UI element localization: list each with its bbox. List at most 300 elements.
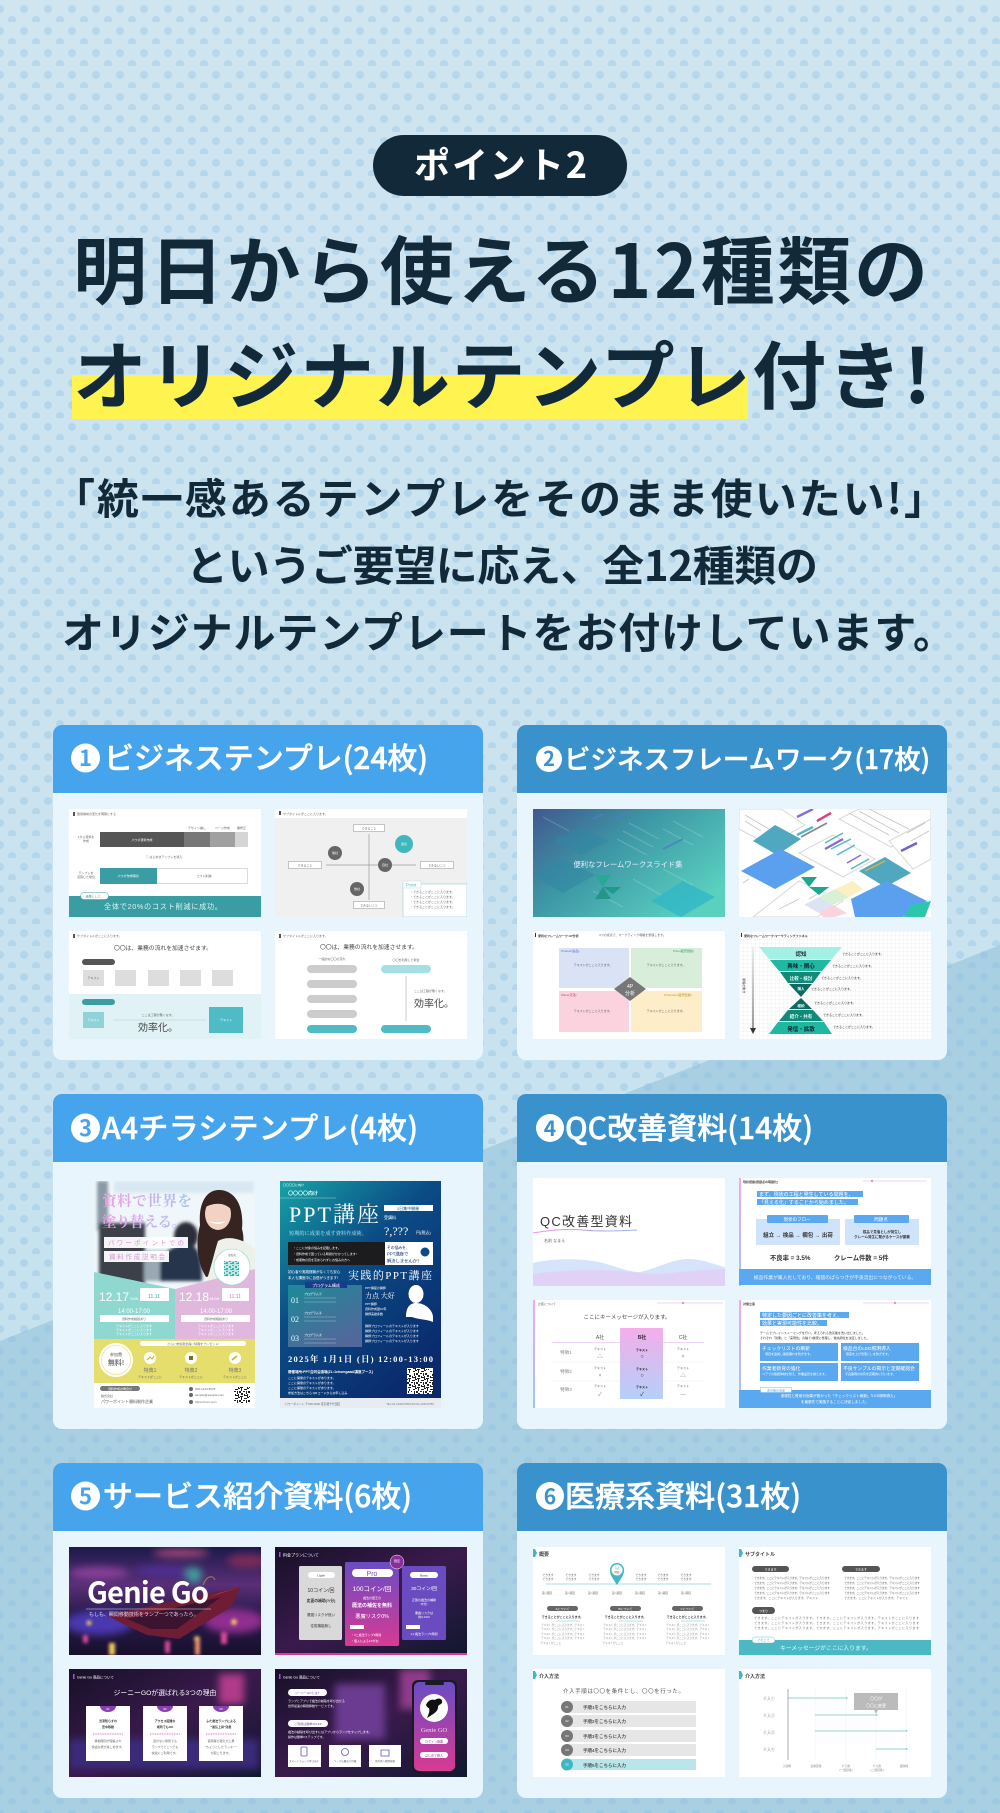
thumbnail: cost bars: [69, 809, 261, 917]
thumbnail: flyer 1: 14:00-17:00: [200, 1309, 233, 1315]
thumbnail: flyer 1: 資料作成相談あり: [122, 1316, 146, 1321]
thumbnail: three reasons: "ちょっとしたラッキー": [205, 1744, 237, 1749]
thumbnail: marketing funnel: 興味・関心: [787, 962, 815, 970]
thumbnail: cost bars: 作成: [83, 838, 89, 843]
thumbnail: marketing funnel: 認知: [795, 950, 807, 958]
thumbnail: price plans: 悪魔リスクが低い: [307, 1612, 335, 1617]
thumbnail: flyer 1: テキストがここに入ります: [198, 1323, 234, 1328]
thumbnail: price plans: 悪魔リスクは: [415, 1610, 433, 1615]
thumbnail: subtitle text: キーメッセージがここに入ります。: [780, 1644, 872, 1652]
thumbnail: cost bars: パワポ作成時間: [117, 873, 139, 878]
thumbnail: flyer 2: ここに開催のテキストがあります。: [288, 1380, 336, 1385]
thumbnail: 4P quadrant: テキストがここに入ります。: [647, 1008, 685, 1013]
panel: 医療系資料: [517, 1463, 947, 1798]
thumbnail: three reasons: 02: [163, 1707, 167, 1711]
thumbnail: price plans: 正確の魔法の補助: [412, 1597, 436, 1602]
thumbnail: QC flow: 不良率 = 3.5%: [770, 1253, 811, 1262]
icon: number 3: [71, 1111, 100, 1143]
thumbnail: overview timeline: [533, 1547, 725, 1655]
thumbnail: flyer 2: 円(税込): [416, 1229, 431, 1235]
thumbnail: improvement measures: を最優先で実施することに決定しました。: [801, 1399, 869, 1404]
thumbnail: marketing funnel: 購入: [798, 986, 805, 991]
thumbnail: flyer 2: 解決しませんか?: [387, 1258, 420, 1264]
thumbnail: flyer 2: PPT講師: [365, 1301, 377, 1306]
thumbnail: improvement measures: ペアでの確認体制を整え、作業品質を揃えます。: [762, 1371, 828, 1376]
thumbnail: 4P quadrant: 分析: [625, 990, 635, 997]
thumbnail: improvement measures: 効果と実現可能性を比較。: [762, 1320, 822, 1327]
thumbnail: overview timeline: テキストがここに入ります。テキスト: [541, 1636, 585, 1640]
thumbnail: intervention chart: 介入④: [763, 1747, 775, 1752]
thumbnail: positioning map: できること: [298, 862, 312, 868]
thumbnail: subtitle text: つまり: [759, 1608, 768, 1613]
thumbnail: flyer 1: 資料作成相談あり: [204, 1316, 228, 1321]
thumbnail: flow efficiency: 効率化。: [138, 1022, 178, 1034]
thumbnail: positioning map: できること: [362, 826, 376, 830]
intro text: オリジナルテンプレートをお付けしています。: [62, 600, 955, 661]
thumbnail: flyer 2: 2025年 1月1日 (日) 12:00-13:00: [288, 1354, 433, 1364]
thumbnail: comparison table: ✓: [598, 1391, 602, 1398]
intro text: 「統一感あるテンプレをそのまま使いたい!」: [53, 466, 946, 527]
thumbnail: intervention chart: 治療直後: [810, 1764, 822, 1768]
thumbnail: overview timeline: できます: [588, 1577, 600, 1581]
thumbnail: QC cover: QC改善型資料: [540, 1214, 632, 1229]
thumbnail: marketing funnel: 比較・検討: [790, 975, 813, 982]
thumbnail: flyer 2: ここに開催のテキストがあります。: [288, 1385, 336, 1390]
thumbnail: app introduction: ランプとアプリで魔法の絨毯を呼び出せる: [288, 1698, 345, 1703]
thumbnail: flow efficiency: サブタイトルがここに入ります。: [77, 933, 122, 938]
thumbnail: flyer 1: 資料作成お問合せ: [108, 1386, 132, 1391]
icon: number 2: [536, 743, 562, 772]
thumbnail: price plans: (5分): [421, 1601, 427, 1606]
thumbnail: flyer 1: テキストがここに入ります: [198, 1327, 234, 1332]
icon: number 6: [536, 1481, 564, 1511]
thumbnail: 4P quadrant: Product(製品): [561, 948, 579, 953]
thumbnail: price plans: 1ヶ魔法ランプ1時間: [410, 1631, 438, 1636]
thumbnail: vertical flow: ここは工程が無くなす。: [414, 988, 447, 993]
thumbnail: overview timeline: できます: [657, 1573, 669, 1577]
thumbnail: flyer 1: MON: [210, 1296, 219, 1301]
silhouette: [406, 1285, 433, 1322]
thumbnail: overview timeline: 介入: [614, 1566, 620, 1570]
thumbnail: comparison table: A社: [596, 1334, 604, 1341]
thumbnail: cost bars: 結果として、: [86, 894, 103, 898]
thumbnail: overview timeline: Aについて: [556, 1607, 569, 1611]
thumbnail: marketing funnel: できることがここに入ります。: [833, 1024, 875, 1029]
panel: A4チラシテンプレ: [53, 1094, 483, 1429]
thumbnail: subtitle text: できます。ここにテキストが入ります。テキストがここに入ります: [754, 1575, 830, 1580]
thumbnail: positioning map: できないこと: [360, 902, 378, 908]
thumbnail: subtitle text: できます。ここにテキストが入ります。テキストがここに入ります: [844, 1575, 920, 1580]
thumbnail: comparison table: △: [597, 1352, 603, 1360]
thumbnail: flyer 2: 01: [291, 1296, 299, 1305]
thumbnail: flyer 1: 参加費: [110, 1351, 122, 1357]
thumbnail: overview timeline: 第○期目: [588, 1591, 598, 1595]
icon: number 4: 4: [544, 1113, 556, 1143]
thumbnail: marketing funnel: 発信・拡散: [787, 1025, 815, 1033]
thumbnail: comparison table: —: [680, 1392, 686, 1398]
thumbnail: price plans: 料金プランについて: [283, 1552, 319, 1558]
heading: サービス紹介資料(6枚): [103, 1472, 412, 1516]
thumbnail: overview timeline: テキストがここに入ります。テキスト: [603, 1623, 647, 1627]
thumbnail: overview timeline: できます: [565, 1577, 577, 1581]
thumbnail: vertical flow: 効率化。: [414, 998, 454, 1010]
thumbnail: overview timeline: テキストがここに入ります。テキスト: [666, 1636, 710, 1640]
thumbnail: subtitle text: できます。ここにテキストが入ります。テキストがここに入ります: [844, 1585, 920, 1590]
thumbnail: comparison table: ×: [681, 1354, 685, 1360]
thumbnail: overview timeline: テキストがここに入ります。テキスト: [541, 1623, 585, 1627]
thumbnail: overview timeline: テキストがここに: [603, 1641, 624, 1645]
thumbnail: subtitle text: できます。ここにテキストが入ります。テキストがここに入ります: [754, 1580, 830, 1585]
thumbnail: intervention chart: 入院時: [783, 1764, 791, 1768]
thumbnail: improvement measures: 改善策の決定: [767, 1388, 785, 1392]
thumbnail: overview timeline: テキストがここに入ります。テキスト: [666, 1627, 710, 1631]
thumbnail: 4P quadrant: Promotion(販売促進): [664, 992, 692, 997]
thumbnail: app introduction: ジーニーGOとは?: [295, 1690, 319, 1695]
thumbnail: marketing funnel: できることがここに入ります。: [821, 975, 863, 980]
thumbnail: overview timeline: Bについて: [619, 1607, 632, 1611]
thumbnail: marketing funnel: 継続: [798, 1003, 805, 1008]
thumbnail: flyer 2: プログラム構成: [312, 1282, 340, 1288]
thumbnail: marketing funnel: できることがここに入ります。: [832, 963, 874, 968]
thumbnail: intervention chart: 介入後: [873, 1764, 881, 1768]
thumbnail: comparison table: ○: [640, 1373, 644, 1379]
thumbnail: comparison table: テキスト: [636, 1384, 648, 1389]
thumbnail: overview timeline: テキストがここに: [541, 1641, 562, 1645]
thumbnail: overview timeline: テキストがここに入ります。テキスト: [603, 1627, 647, 1631]
thumbnail: subtitle text: できます。ここにテキストが入ります。できます。ここにテキストが入ります。テキストがここに入ります: [754, 1625, 919, 1630]
thumbnail: intervention steps: [533, 1669, 725, 1777]
thumbnail: intervention steps: 介入手順は〇〇を条件とし、〇〇を行った。: [563, 1687, 684, 1695]
thumbnail: 4P quadrant: テキストがここに入ります。: [574, 1008, 612, 1013]
thumbnail: comparison table: 特徴3: [560, 1386, 572, 1393]
thumbnail: price plans: 100コイン/回: [353, 1585, 391, 1593]
thumbnail: 4P quadrant: 4P: [627, 984, 634, 990]
heading: ビジネスフレームワーク(17枚): [564, 738, 930, 777]
panel: ビジネステンプレ: [53, 725, 483, 1060]
thumbnail: flyer 1: テキストがここに入ります: [116, 1331, 152, 1336]
thumbnail: flyer 2: パワーポイント:〒000-0000 東京都千代田区: [285, 1402, 341, 1406]
thumbnail: flyer 1: 11.11: [148, 1294, 160, 1300]
thumbnail: flyer 2: [280, 1181, 441, 1408]
intro text: というご要望に応え、全12種類の: [186, 533, 818, 594]
thumbnail: intervention steps: 手順4をこちらに入力: [583, 1747, 627, 1754]
thumbnail: flyer 1: 特典1: [144, 1367, 157, 1374]
thumbnail: QC cover: [533, 1178, 725, 1286]
thumbnail: cost bars: デザイン崩し: [188, 825, 206, 830]
thumbnail: overview timeline: できます: [680, 1573, 692, 1577]
badge: ポイント2: ポイント2: [414, 137, 587, 189]
thumbnail: three reasons: アクセス困難な: [155, 1718, 175, 1723]
thumbnail: three reasons: 空中移動: [102, 1724, 114, 1729]
thumbnail: three reasons: ランプでどこへでも: [152, 1744, 178, 1749]
thumbnail: flyer 2: 短期的に成果を成す資料作成術。: [289, 1229, 367, 1237]
thumbnail: flyer 2: 力点 大好: [365, 1291, 395, 1300]
intro text: [53, 466, 955, 661]
thumbnail: intervention chart: 〇〇に変更: [866, 1702, 886, 1708]
thumbnail: flyer 2: ?,???: [384, 1224, 408, 1238]
thumbnail: comparison table: ここにキーメッセージが入ります。: [583, 1313, 671, 1321]
thumbnail: app introduction: 目的地へ瞬間移動: [375, 1759, 395, 1763]
thumbnail: intervention chart: [739, 1669, 931, 1777]
phone: ログイン画面: [425, 1738, 443, 1744]
thumbnail: flyer 1: テキストがここに: [223, 1374, 247, 1379]
thumbnail: positioning map: ・できることがここに入ります。: [410, 899, 455, 904]
thumbnail: flyer 1: 参加者: [228, 1253, 236, 1257]
thumbnail: flyer 1: sample@sample.com: [195, 1393, 224, 1397]
thumbnail: flow efficiency: テキスト: [88, 1017, 99, 1022]
thumbnail: improvement measures: 実現性と費用対効果が高かった「チェックリスト刷新」「LED照明導入」: [781, 1393, 897, 1398]
thumbnail: flyer 1: 12.18: [179, 1290, 209, 1304]
thumbnail: flyer 2: ・資料作成で困っている時間がかかってします!: [293, 1251, 357, 1256]
thumbnail: overview timeline: できます: [635, 1577, 647, 1581]
thumbnail: cost bars: 微修正: [237, 825, 246, 830]
thumbnail: QC flow: 現状把握(問題点の明確化): [743, 1179, 778, 1184]
thumbnail: price plans: 魔法の補佐を無料: [352, 1602, 392, 1609]
thumbnail: subtitle text: できます。ここにテキストが入ります。テキストがここに入ります: [844, 1590, 920, 1595]
thumbnail: comparison table: 特徴1: [560, 1349, 572, 1356]
thumbnail: flyer 1: テキストがここに入ります: [198, 1331, 234, 1336]
thumbnail: comparison table: ✓: [640, 1391, 644, 1398]
thumbnail: intervention chart: 介入方法: [745, 1673, 765, 1680]
thumbnail: price plans: 30コイン/回: [411, 1586, 437, 1592]
thumbnail: price plans: ・個人による1Pがお: [351, 1638, 379, 1643]
thumbnail: Genie Go cover: もしも、瞬間移動技術をランプ一つであったら。: [89, 1611, 199, 1618]
thumbnail: vertical flow: 〇〇を利用した場合: [392, 957, 420, 962]
thumbnail: positioning map: サブタイトルがここに入ります。: [283, 811, 328, 816]
thumbnail: improvement measures: 検品台のLED照明導入: [843, 1345, 891, 1352]
thumbnail: subtitle text: できます。ここにテキストが入ります。テキストがここに入ります: [754, 1585, 830, 1590]
thumbnail: comparison table: 特徴2: [560, 1368, 572, 1375]
thumbnail: flyer 2: 初心者や実践経験がなくても安心: [288, 1269, 341, 1274]
heading: A4チラシテンプレ(4枚): [102, 1104, 418, 1148]
thumbnail: QC flow: クレーム件数 = 5件: [834, 1253, 889, 1262]
thumbnail: app introduction: [275, 1669, 467, 1777]
icon: number 1: 1: [79, 741, 92, 773]
thumbnail: flyer 2: 講師プロフィールのテキストが入ります: [365, 1338, 419, 1343]
thumbnail: comparison table: テキスト: [594, 1346, 606, 1351]
thumbnail: intervention chart: 介入②: [763, 1713, 775, 1718]
icon: number 2: 2: [543, 743, 555, 772]
thumbnail: comparison table: テキスト: [677, 1383, 689, 1388]
thumbnail: vertical flow: [275, 931, 467, 1039]
thumbnail: subtitle text: [739, 1547, 931, 1655]
thumbnail: three reasons: が起こります。: [211, 1750, 231, 1755]
thumbnail: subtitle text: サブタイトル: [745, 1551, 775, 1558]
thumbnail: three reasons: 移動時間が短縮され: [94, 1738, 122, 1743]
thumbnail: improvement measures: 項目を追加し確認漏れを防ぎます。: [765, 1351, 813, 1356]
icon: number 3: 3: [79, 1111, 92, 1143]
icon: number 1: [71, 741, 100, 773]
thumbnail: flyer 2: PPT講座で: [387, 1250, 408, 1258]
thumbnail: flyer 1: さらに参加者全員に特典をプレゼント!: [167, 1341, 219, 1346]
thumbnail: overview timeline: テキストがここに入ります。テキスト: [541, 1627, 585, 1631]
thumbnail: flyer 1: 11.11: [229, 1294, 241, 1300]
thumbnail: positioning map: 他社: [354, 886, 360, 891]
thumbnail: intervention chart: 〇〇が: [870, 1695, 882, 1701]
thumbnail: flow efficiency: ここは工程が無くなす。: [142, 1012, 174, 1017]
thumbnail: vertical flow: サブタイトルがここに入ります。: [283, 933, 328, 938]
thumbnail: comparison table: ×: [598, 1373, 602, 1379]
thumbnail: intervention chart: 介入後: [842, 1764, 850, 1768]
thumbnail: improvement measures: 不良事例の共有を定期的に行います。: [845, 1371, 896, 1376]
thumbnail: intervention chart: 退院時: [900, 1764, 908, 1768]
thumbnail: app introduction: スマートフォンで呼び出す: [289, 1759, 319, 1763]
thumbnail: improvement measures: 対策立案: [743, 1301, 755, 1306]
thumbnail: intervention steps: 手順2をこちらに入力: [583, 1718, 627, 1725]
thumbnail: flyer 2: 実践的PPT講座: [348, 1268, 432, 1282]
thumbnail: app introduction: 魔法の絨毯を呼び出すにはアプリからランプをタップします。: [288, 1729, 372, 1734]
thumbnail: overview timeline: 第○期目: [612, 1591, 622, 1595]
phone: Genie GO: [421, 1727, 448, 1734]
thumbnail: 4P quadrant: Price(販売価格): [673, 948, 694, 953]
thumbnail: intervention steps: 05: [565, 1762, 569, 1766]
thumbnail: overview timeline: できることがここに入ります。: [667, 1614, 708, 1619]
thumbnail: price plans: Light: [317, 1574, 325, 1578]
thumbnail: flyer 2: プログラム②: [304, 1310, 322, 1315]
thumbnail: flyer 1: 株式会社: [101, 1393, 113, 1398]
thumbnail: cost bars: 費用構成の変化を明確にする: [77, 811, 116, 816]
thumbnail: marketing funnel: できることがここに入ります。: [823, 1012, 865, 1017]
thumbnail: subtitle text: できます。ここにテキストが入ります。テキストがここに入ります: [844, 1580, 920, 1585]
panel: サービス紹介資料: [53, 1463, 483, 1798]
thumbnail: subtitle text: できます。ここにテキストが入ります。できます。ここにテキストが入ります。テキストがここに入ります: [754, 1620, 919, 1625]
thumbnail: improvement measures: 特定した要因ごとに改善策を考え、: [762, 1312, 842, 1319]
thumbnail: comparison table: テキスト: [594, 1365, 606, 1370]
thumbnail: positioning map: できないこと: [428, 862, 446, 868]
thumbnail: flyer 1: 塗り替える。: [102, 1213, 186, 1231]
thumbnail: cost bars: ▽ はじめまテンプレを導入: [146, 854, 182, 859]
thumbnail: price plans: 10コイン/回: [308, 1588, 334, 1594]
thumbnail: intervention steps: 04: [565, 1748, 569, 1752]
panel: ビジネスフレームワーク: [517, 725, 947, 1060]
thumbnail: price plans: [275, 1547, 467, 1655]
thumbnail: flyer 2: その悩みを、: [387, 1245, 410, 1250]
thumbnail: flyer 2: ・ここに対象の悩みを記載します。: [293, 1245, 341, 1250]
thumbnail: QC flow: 検品で見落としが発生し: [863, 1229, 902, 1234]
thumbnail: positioning map: 他社: [332, 850, 338, 855]
thumbnail: marketing funnel: 便利なフレームワーク:マーケティングファネル: [744, 933, 808, 938]
thumbnail: flyer 1: 無料!: [108, 1358, 124, 1367]
thumbnail: QC flow: 組立 → 検品 → 梱包 → 出荷: [763, 1231, 833, 1239]
thumbnail: overview timeline: 概要: [539, 1551, 549, 1558]
thumbnail: subtitle text: できます。ここにテキストが入ります。テキスト: [844, 1595, 908, 1600]
thumbnail: marketing funnel: 顧客の動き: [742, 978, 747, 994]
thumbnail: flyer 1: テキストがここに: [179, 1374, 203, 1379]
thumbnail: three reasons: 使用者の運気が上昇: [207, 1738, 235, 1743]
thumbnail: comparison table: テキスト: [677, 1346, 689, 1351]
thumbnail: framework cover: 便利なフレームワークスライド集: [573, 860, 683, 869]
thumbnail: subtitle text: できます: [764, 1566, 777, 1572]
thumbnail: comparison table: 比較について: [538, 1301, 556, 1306]
thumbnail: flyer 1: 特典2: [185, 1367, 198, 1374]
thumbnail: framework cover: [533, 809, 725, 917]
thumbnail: intervention steps: 手順5をこちらに入力: [583, 1762, 627, 1769]
thumbnail: price plans: 往復機能無し: [310, 1623, 332, 1628]
thumbnail: three reasons: Genie Go 商品について: [77, 1674, 114, 1680]
thumbnail: flyer 1: テキストがここに入ります: [116, 1327, 152, 1332]
thumbnail: flyer 2: 1日集中開催: [397, 1205, 419, 1211]
thumbnail: flyer 1: テキストがここに: [138, 1374, 162, 1379]
thumbnail: flyer 2: 開催場所:PPT合同会議場(ZL:1chomgaad/講座ブース): [288, 1369, 373, 1374]
thumbnail: positioning map: ・できることがここに入ります。: [410, 889, 455, 894]
thumbnail: cost bars: 1から資料を: [78, 834, 94, 839]
thumbnail: Genie Go cover: [69, 1547, 261, 1655]
thumbnail: marketing funnel: できることがここに入ります。: [842, 951, 884, 956]
thumbnail: positioning map: 自社: [382, 862, 388, 867]
thumbnail: improvement measures: チームでブレインストーミングを行い、考えられる改善策を洗い出しました。: [760, 1330, 865, 1335]
icon: number 4: [536, 1113, 564, 1143]
thumbnail: flyer 2: 〇〇〇〇向け: [288, 1190, 318, 1197]
thumbnail: 4P quadrant: テキストがここに入ります。: [647, 962, 685, 967]
thumbnail: three reasons: 道がない場所でも: [153, 1738, 177, 1743]
thumbnail: flow efficiency: テキスト: [88, 975, 99, 980]
thumbnail: flyer 2: プログラム③: [304, 1332, 322, 1337]
thumbnail: overview timeline: できます: [657, 1577, 669, 1581]
thumbnail: overview timeline: テキストがここに入ります。テキスト: [603, 1632, 647, 1636]
thumbnail: subtitle text: できます。ここにテキストが入ります。テキスト: [754, 1595, 818, 1600]
thumbnail: cost bars: ページ作成: [215, 825, 230, 830]
thumbnail: three reasons: ふた魔法ランプによる: [206, 1718, 236, 1723]
thumbnail: flyer 2: 資料作成歴10年: [365, 1306, 386, 1311]
thumbnail: overview timeline: テキストがここに入ります。テキスト: [666, 1623, 710, 1627]
thumbnail: three reasons: "運気上昇"効果: [211, 1724, 231, 1729]
thumbnail: framework collage: [739, 809, 931, 917]
thumbnail: subtitle text: できます。ここにテキストが入ります。テキストがここに入ります: [754, 1590, 830, 1595]
thumbnail: three reasons: 快適にご利用です。: [152, 1750, 178, 1755]
thumbnail: flyer 1: 12.17: [99, 1290, 129, 1304]
thumbnail: three reasons: 快適な旅が楽しめます。: [92, 1744, 124, 1749]
thumbnail: intervention steps: 03: [565, 1734, 569, 1738]
carpet: [107, 1587, 241, 1639]
thumbnail: flyer 2: 参加方法はこちら:QRコードからお申し込み: [288, 1390, 347, 1395]
thumbnail: flyer 2: 講師プロフィールのテキストが入ります: [365, 1333, 419, 1338]
thumbnail: vertical flow: 一般的な〇〇の流れ: [318, 956, 346, 961]
thumbnail: positioning map: [275, 809, 467, 917]
thumbnail: QC cover: 名前 なまえ: [544, 1237, 565, 1243]
thumbnail: marketing funnel: できることがここに入ります。: [811, 986, 853, 991]
thumbnail: QC flow: [739, 1178, 931, 1286]
thumbnail: overview timeline: テキストがここに入ります。テキスト: [603, 1636, 647, 1640]
badge: ポイント2: [373, 135, 627, 196]
thumbnail: flyer 1: 資料で世界を: [102, 1192, 192, 1210]
thumbnail: flyer 1: SUN: [130, 1296, 139, 1301]
thumbnail: flyer 1: 14:00-17:00: [118, 1309, 151, 1315]
phone: はじめて購入: [425, 1752, 443, 1758]
thumbnail: price plans: 変更の補助(?/分): [307, 1598, 336, 1603]
thumbnail: flow efficiency: テキスト: [220, 1017, 232, 1022]
thumbnail: comparison table: ○: [640, 1354, 644, 1360]
thumbnail: marketing funnel: [739, 931, 931, 1039]
thumbnail: overview timeline: できます: [680, 1577, 692, 1581]
thumbnail: price plans: ・4二魔法ランプ3時間: [351, 1632, 381, 1637]
thumbnail: three reasons: ジーニーGOが選ばれる3つの理由: [114, 1688, 217, 1697]
thumbnail: QC flow: まず、現状の工程と発生している問題を、: [759, 1191, 854, 1198]
thumbnail: price plans: 魔法の国王の: [363, 1595, 381, 1600]
thumbnail: intervention chart: (一週目後): [839, 1768, 853, 1772]
icon: number 5: 5: [79, 1479, 92, 1511]
thumbnail: improvement measures: チェックリストの刷新: [762, 1345, 810, 1352]
thumbnail: flyer 2: プログラム①: [304, 1291, 322, 1296]
thumbnail: overview timeline: 第○期目: [658, 1591, 668, 1595]
thumbnail: comparison table: [533, 1300, 725, 1408]
thumbnail: flyer 2: 〇〇〇〇に向け: [283, 1182, 304, 1187]
thumbnail: intervention steps: 手順3をこちらに入力: [583, 1733, 627, 1740]
thumbnail: flyer 2: PPT講座の講師: [365, 1285, 386, 1290]
thumbnail: subtitle text: その上で: [757, 1637, 770, 1642]
icon: number 5: [71, 1479, 100, 1511]
thumbnail: comparison table: △: [680, 1371, 686, 1379]
thumbnail: flyer 1: 資料作成説明会: [109, 1252, 166, 1261]
